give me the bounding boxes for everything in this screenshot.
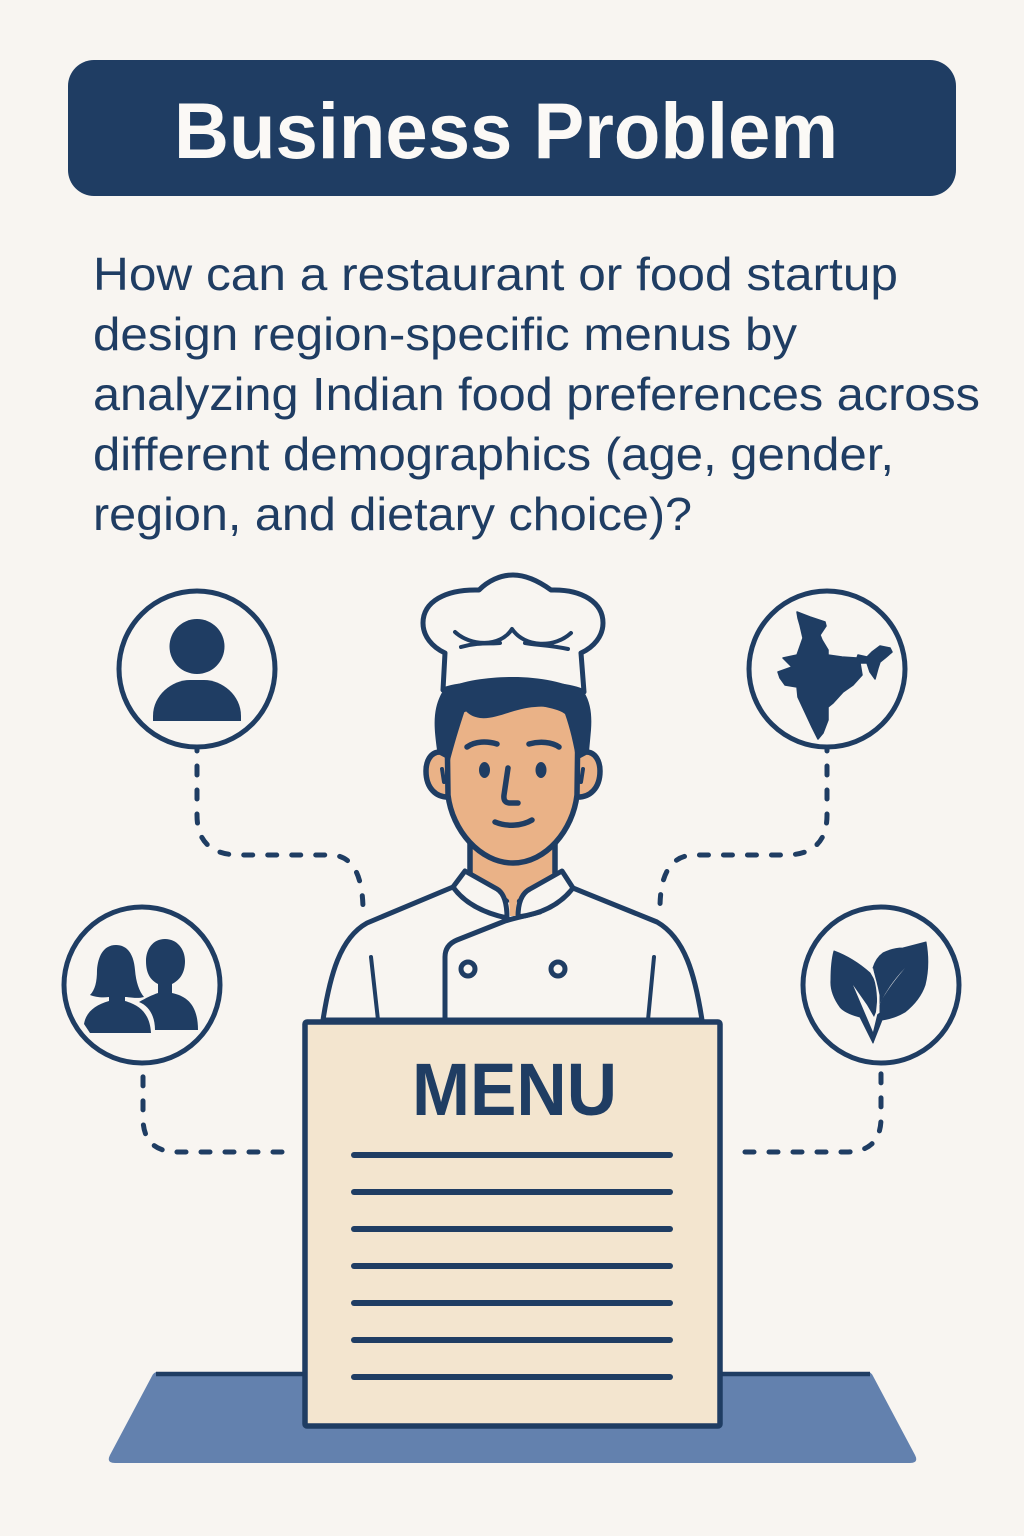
icon: India map (region) (749, 591, 905, 747)
icon: leaves (dietary choice) (803, 907, 959, 1063)
menu board (305, 1022, 720, 1426)
problem statement text: analyzing Indian food preferences across (93, 368, 980, 420)
title banner (68, 60, 956, 196)
problem statement text: design region-specific menus by (93, 308, 797, 360)
brows, nose and mouth (467, 742, 559, 825)
problem statement text (93, 248, 980, 540)
menu heading: MENU (412, 1048, 617, 1131)
eyes (479, 762, 490, 778)
icon: man and woman (gender) (64, 907, 220, 1063)
chef illustration (323, 575, 702, 1020)
neck (470, 840, 555, 916)
menu lines (354, 1155, 670, 1377)
problem statement text: How can a restaurant or food startup (93, 248, 898, 300)
table surface (109, 1372, 916, 1463)
collar (453, 871, 573, 918)
dashed connectors (143, 742, 881, 1152)
problem statement text: region, and dietary choice)? (93, 488, 692, 540)
chef jacket (323, 887, 702, 1020)
title banner: Business Problem (174, 86, 838, 175)
hat (423, 575, 603, 692)
ears (426, 752, 600, 797)
face (447, 701, 578, 863)
hair (435, 677, 591, 764)
problem statement text: different demographics (age, gender, (93, 428, 894, 480)
icon: person (age) (119, 591, 275, 747)
